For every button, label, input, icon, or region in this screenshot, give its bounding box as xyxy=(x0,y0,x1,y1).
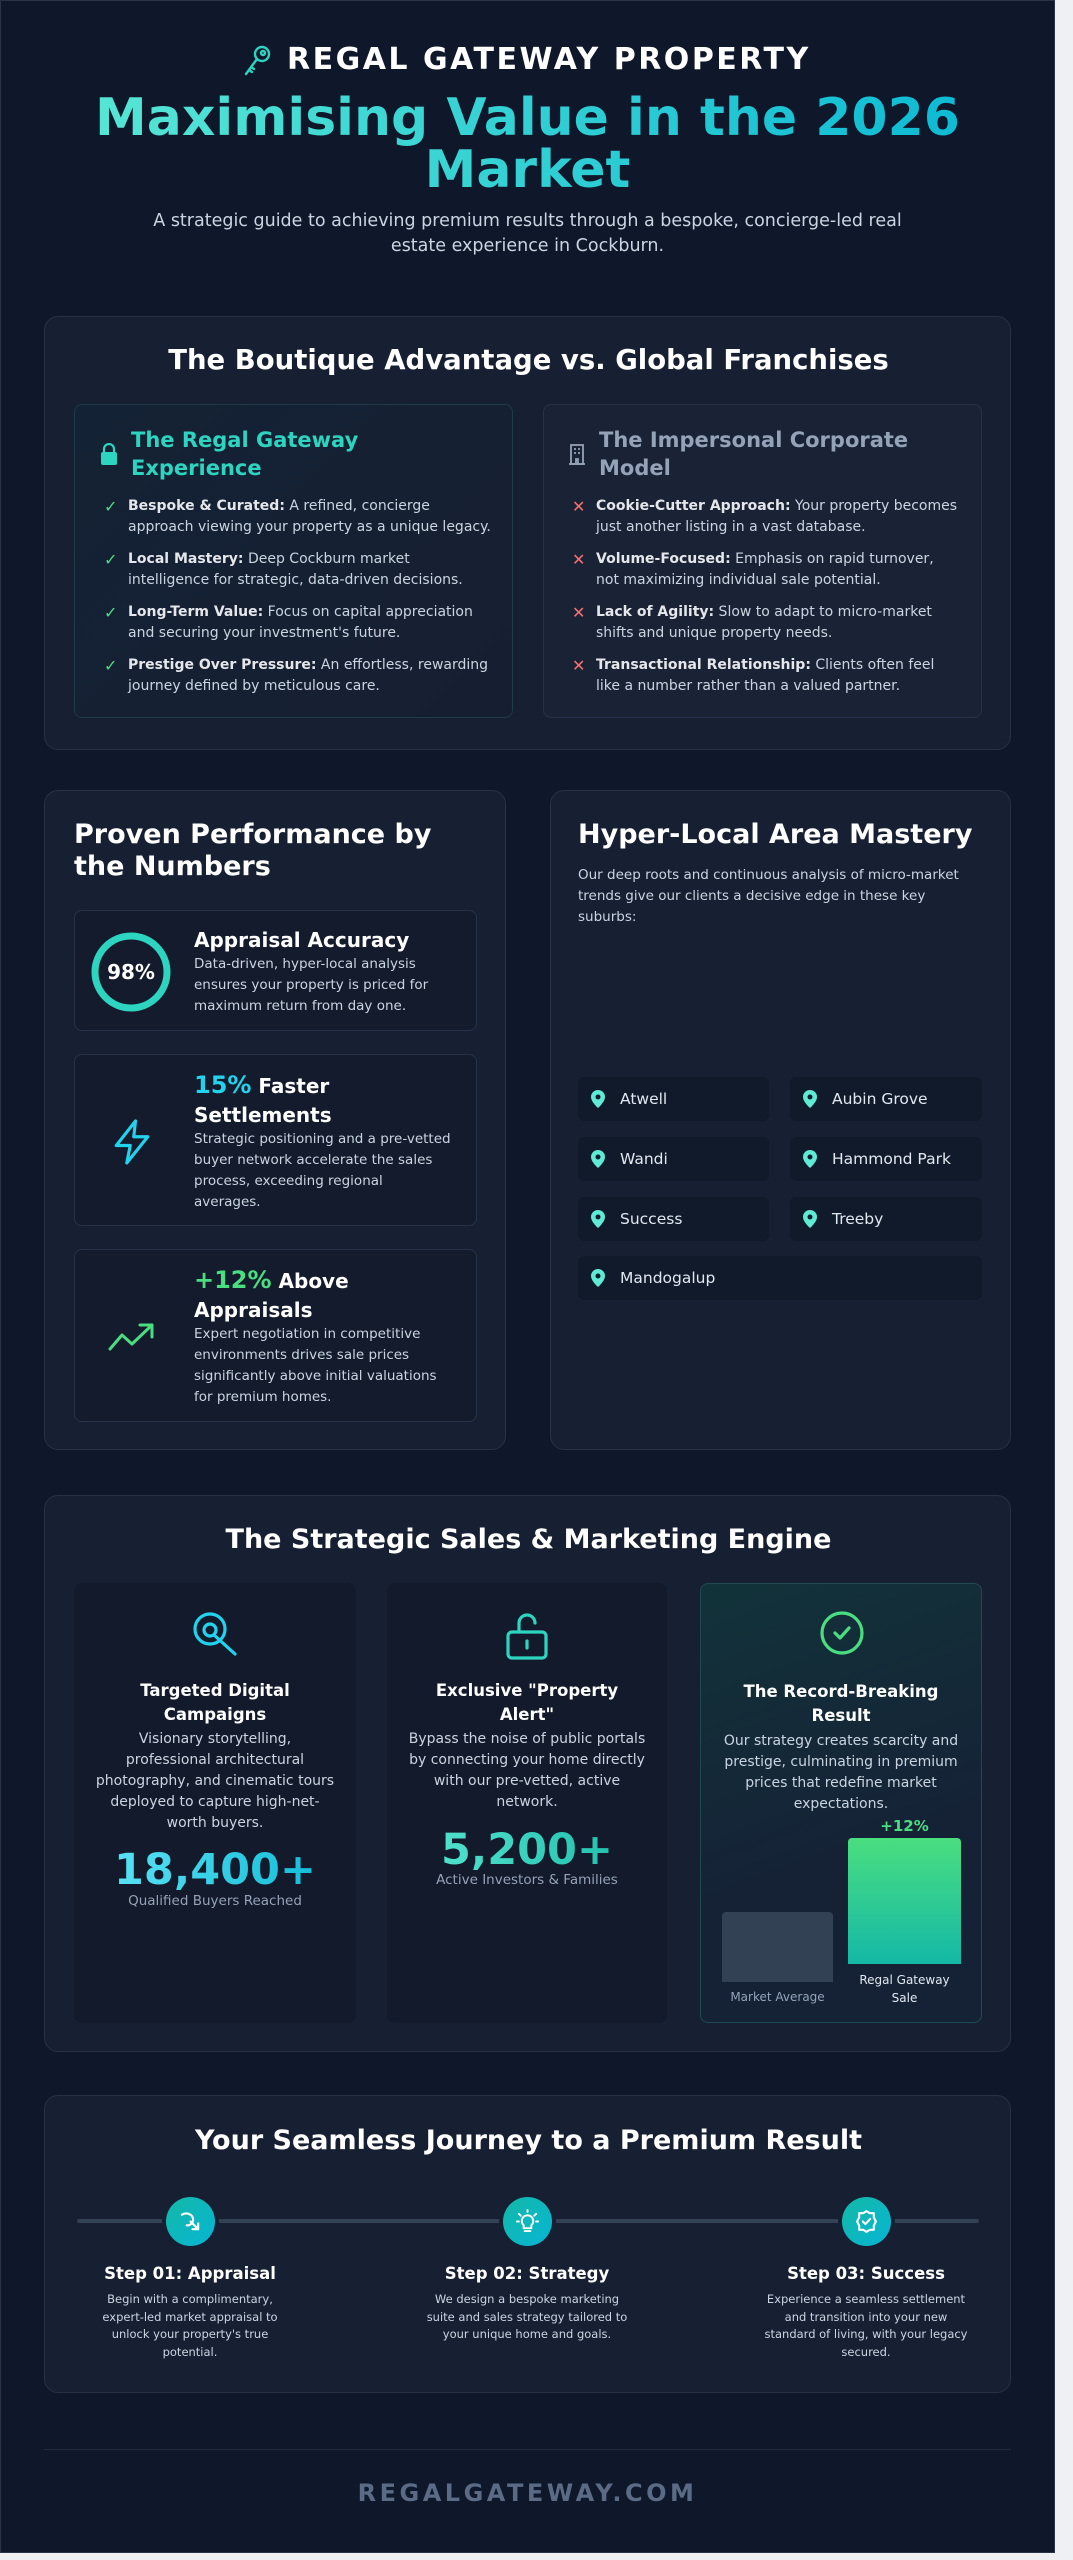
chip: Treeby: Treeby xyxy=(832,1210,883,1228)
chip: Hammond Park: Hammond Park xyxy=(832,1150,951,1168)
heading: Model xyxy=(599,456,671,480)
card: regal gateway experience: and securing your investment's future. xyxy=(128,625,400,641)
card: targeted digital campaigns: worth buyers. xyxy=(167,1815,263,1831)
heading xyxy=(131,428,358,480)
icon: lightning xyxy=(114,1119,150,1165)
card: regal gateway experience: ✓ xyxy=(104,550,117,569)
chip: Aubin Grove: Aubin Grove xyxy=(832,1090,928,1108)
heading: The Strategic Sales & Marketing Engine xyxy=(226,1524,831,1555)
stat card: above appraisals: Expert negotiation in competitive xyxy=(194,1326,420,1342)
card: record-breaking result: Our strategy creates scarcity and xyxy=(724,1733,958,1749)
step 1 text: Begin with a complimentary, expert-led market appraisal to unlock your property's true potential. xyxy=(102,2292,278,2359)
card: exclusive property alert: Exclusive "Property xyxy=(436,1681,618,1700)
bar chart: Regal Gateway xyxy=(859,1973,950,1987)
stat card: faster settlements: averages. xyxy=(194,1194,261,1210)
footer: website: REGALGATEWAY.COM xyxy=(358,2479,697,2507)
description: Our deep roots and continuous analysis of micro-market trends give our clients a decisive edge in these key suburbs: xyxy=(578,867,959,925)
step 3 text: Step 03: Success xyxy=(787,2264,945,2283)
step 2 text: Step 02: Strategy xyxy=(445,2264,609,2283)
heading: Proven Performance by xyxy=(74,819,431,850)
chip: Mandogalup: Mandogalup xyxy=(620,1269,715,1287)
heading xyxy=(599,428,908,480)
card: targeted digital campaigns: Targeted Digital xyxy=(140,1681,290,1700)
stat card: faster settlements: process, exceeding regional xyxy=(194,1173,383,1189)
card: exclusive property alert: Active Investors & Families xyxy=(436,1872,618,1888)
icon: key xyxy=(244,46,270,76)
card: regal gateway experience: Long-Term Value: Focus on capital appreciation xyxy=(128,604,473,620)
heading: the Numbers xyxy=(74,851,271,882)
icon: building xyxy=(569,444,585,465)
card: record-breaking result: prestige, culminating in premium xyxy=(724,1754,958,1770)
bar: regal gateway sale: +12% xyxy=(880,1817,929,1835)
panel: proven performance xyxy=(44,790,506,1450)
card: impersonal corporate model: ✕ xyxy=(572,656,585,675)
icon: search target xyxy=(193,1612,237,1656)
icon: check circle xyxy=(820,1611,864,1655)
stat card: above appraisals: environments drives sale prices xyxy=(194,1347,409,1363)
card: regal gateway experience: ✓ xyxy=(104,603,117,622)
heading: Hyper-Local Area Mastery xyxy=(578,819,972,850)
step 1 text: Step 01: Appraisal xyxy=(104,2264,276,2283)
card: impersonal corporate model: like a number rather than a valued partner. xyxy=(596,678,900,694)
stat card: above appraisals: for premium homes. xyxy=(194,1389,331,1405)
stat card: appraisal accuracy: Data-driven, hyper-local analysis xyxy=(194,956,416,972)
card: targeted digital campaigns: photography, and cinematic tours xyxy=(96,1773,334,1789)
stat card: appraisal accuracy xyxy=(74,910,477,1031)
chip: Success xyxy=(578,1197,769,1241)
card: impersonal corporate model xyxy=(543,404,982,718)
card: impersonal corporate model: Transactional Relationship: Clients often feel xyxy=(596,657,934,673)
step 2 text: We design a bespoke marketing suite and sales strategy tailored to your unique home and goals. xyxy=(427,2292,627,2341)
card: impersonal corporate model: shifts and unique property needs. xyxy=(596,625,832,641)
panel: seamless journey xyxy=(44,2095,1011,2393)
icon: ring 98%: 98% xyxy=(107,960,155,984)
card: record-breaking result: Result xyxy=(811,1706,870,1725)
stat card: appraisal accuracy: maximum return from day one. xyxy=(194,998,406,1014)
card: regal gateway experience: journey defined by meticulous care. xyxy=(128,678,380,694)
bar chart xyxy=(722,1817,961,2005)
card: impersonal corporate model: Lack of Agility: Slow to adapt to micro-market xyxy=(596,604,932,620)
card: impersonal corporate model: Cookie-Cutter Approach: Your property becomes xyxy=(596,498,957,514)
card: regal gateway experience: Local Mastery: Deep Cockburn market xyxy=(128,551,410,567)
card: record-breaking result: The Record-Breaking xyxy=(744,1682,938,1701)
icon: unlocked padlock xyxy=(506,1613,548,1660)
stat card: appraisal accuracy: ensures your property is priced for xyxy=(194,977,428,993)
card: exclusive property alert xyxy=(387,1583,667,2023)
card: targeted digital campaigns: Qualified Buyers Reached xyxy=(128,1893,302,1909)
chip: Hammond Park xyxy=(790,1137,982,1181)
card: targeted digital campaigns: professional architectural xyxy=(126,1752,304,1768)
card: exclusive property alert: with our pre-vetted, active xyxy=(434,1773,620,1789)
card: regal gateway experience: ✓ xyxy=(104,497,117,516)
stat card: appraisal accuracy: Appraisal Accuracy xyxy=(194,928,409,952)
chip: Atwell xyxy=(578,1077,769,1121)
card: regal gateway experience: Bespoke & Curated: A refined, concierge xyxy=(128,498,430,514)
title: Maximising Value in the 2026 xyxy=(95,88,960,148)
timeline line xyxy=(77,2219,979,2223)
chip: Success: Success xyxy=(620,1210,682,1228)
heading: The Impersonal Corporate xyxy=(599,428,908,452)
icon: ring 98% xyxy=(92,932,170,1012)
card: targeted digital campaigns: Campaigns xyxy=(164,1705,266,1724)
chip: Atwell: Atwell xyxy=(620,1090,667,1108)
card: record-breaking result xyxy=(700,1583,982,2023)
stat card: faster settlements: buyer network accelerate the sales xyxy=(194,1152,432,1168)
stat card: faster settlements: 15% Faster xyxy=(194,1071,329,1099)
heading: Your Seamless Journey to a Premium Result xyxy=(195,2125,862,2156)
card: exclusive property alert: by connecting your home directly xyxy=(409,1752,645,1768)
icon: trending up xyxy=(108,1323,154,1351)
bar chart: Sale xyxy=(892,1991,917,2005)
card: targeted digital campaigns xyxy=(74,1583,356,2023)
suburb chips xyxy=(578,1077,982,1300)
step 3 text: Experience a seamless settlement and transition into your new standard of living, with your legacy secured. xyxy=(764,2292,968,2359)
chip: Aubin Grove xyxy=(790,1077,982,1121)
card: impersonal corporate model: ✕ xyxy=(572,550,585,569)
stat card: above appraisals xyxy=(74,1249,477,1422)
card: exclusive property alert: Bypass the noise of public portals xyxy=(409,1731,645,1747)
card: impersonal corporate model: ✕ xyxy=(572,497,585,516)
stat card: above appraisals: Appraisals xyxy=(194,1298,312,1322)
chip: Wandi: Wandi xyxy=(620,1150,668,1168)
stat card: faster settlements: Strategic positioning and a pre-vetted xyxy=(194,1131,451,1147)
title: Market xyxy=(425,140,630,200)
heading xyxy=(74,819,431,882)
card: regal gateway experience: approach viewing your property as a unique legacy. xyxy=(128,519,491,535)
bar: market average xyxy=(722,1912,833,1982)
panel: boutique advantage xyxy=(44,316,1011,750)
panel: hyper-local area mastery xyxy=(550,790,1011,1450)
subtitle: A strategic guide to achieving premium results through a bespoke, concierge-led real estate experience in Cockburn. xyxy=(153,211,902,256)
title xyxy=(0,92,1055,196)
step 2 icon xyxy=(503,2197,552,2246)
panel: strategic sales & marketing engine xyxy=(44,1495,1011,2052)
chip: Mandogalup xyxy=(578,1256,982,1300)
card: impersonal corporate model: Volume-Focused: Emphasis on rapid turnover, xyxy=(596,551,934,567)
heading: The Boutique Advantage vs. Global Franchises xyxy=(168,344,889,376)
step 2 text xyxy=(427,2264,627,2341)
header: brand: REGAL GATEWAY PROPERTY xyxy=(287,42,811,77)
chip: Treeby xyxy=(790,1197,982,1241)
icon: lock xyxy=(101,443,117,465)
card: record-breaking result: expectations. xyxy=(794,1796,888,1812)
step 1 icon xyxy=(166,2197,215,2246)
card: regal gateway experience: Prestige Over Pressure: An effortless, rewarding xyxy=(128,657,488,673)
card: exclusive property alert: 5,200+ xyxy=(441,1825,613,1875)
card: targeted digital campaigns: 18,400+ xyxy=(114,1845,316,1895)
card: record-breaking result: prices that redefine market xyxy=(745,1775,937,1791)
footer divider xyxy=(44,2449,1011,2450)
stat card: above appraisals: significantly above initial valuations xyxy=(194,1368,437,1384)
card: impersonal corporate model: just another listing in a vast database. xyxy=(596,519,866,535)
step 3 icon xyxy=(842,2197,891,2246)
stat card: above appraisals: +12% Above xyxy=(194,1266,349,1294)
card: targeted digital campaigns: deployed to capture high-net- xyxy=(110,1794,320,1810)
stat card: faster settlements xyxy=(74,1054,477,1226)
card: exclusive property alert: Alert" xyxy=(500,1705,554,1724)
card: regal gateway experience: intelligence for strategic, data-driven decisions. xyxy=(128,572,463,588)
stat card: faster settlements: Settlements xyxy=(194,1103,332,1127)
card: regal gateway experience: ✓ xyxy=(104,656,117,675)
chip: Wandi xyxy=(578,1137,769,1181)
card: impersonal corporate model: not maximizing individual sale potential. xyxy=(596,572,881,588)
card: regal gateway experience xyxy=(74,404,513,718)
heading: Experience xyxy=(131,456,262,480)
card: targeted digital campaigns: Visionary storytelling, xyxy=(139,1731,291,1747)
heading: The Regal Gateway xyxy=(131,428,358,452)
card: exclusive property alert: network. xyxy=(496,1794,558,1810)
bar chart: Market Average xyxy=(730,1990,825,2004)
card: impersonal corporate model: ✕ xyxy=(572,603,585,622)
